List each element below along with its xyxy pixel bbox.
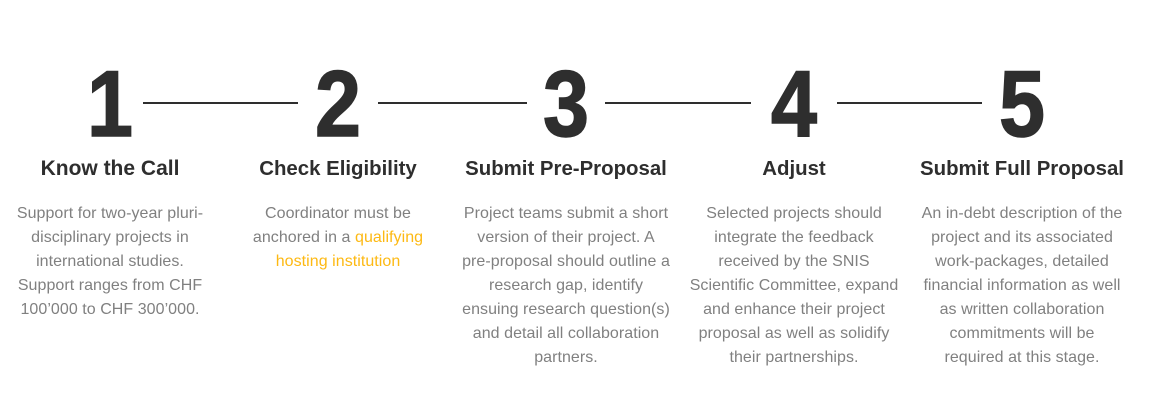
step 1: Know the Call bbox=[17, 51, 203, 318]
heading: Check Eligibility: Check Eligibility bbox=[259, 158, 417, 180]
text: step 1 description bbox=[17, 205, 203, 318]
text: step 2 description: hosting institution bbox=[276, 253, 400, 270]
text: step 3 description: pre-proposal should outline a bbox=[462, 253, 670, 270]
text: step 3 description: and detail all collaboration bbox=[473, 325, 659, 342]
text: step 4 description: Selected projects should bbox=[706, 205, 882, 222]
text: step 4 description: Scientific Committee, expand bbox=[690, 277, 898, 294]
connector line 3 to 4 bbox=[605, 102, 751, 104]
number 4: 4 bbox=[771, 51, 817, 156]
connector line 2 to 3 bbox=[378, 102, 527, 104]
step 5: Submit Full Proposal bbox=[920, 51, 1124, 366]
text: step 3 description bbox=[462, 205, 670, 366]
text: step 4 description: and enhance their project bbox=[703, 301, 885, 318]
text: step 3 description: version of their project. A bbox=[477, 229, 655, 246]
text: step 1 description: Support ranges from CHF bbox=[18, 277, 202, 294]
step 4: Adjust bbox=[690, 51, 898, 366]
heading: Submit Full Proposal: Submit Full Proposal bbox=[920, 158, 1124, 180]
text: step 5 description bbox=[922, 205, 1122, 366]
text: step 1 description: Support for two-year pluri- bbox=[17, 205, 203, 222]
text: step 5 description: commitments will be bbox=[950, 325, 1094, 342]
text: step 5 description: An in-debt description of the bbox=[922, 205, 1122, 222]
heading: Submit Pre-Proposal: Submit Pre-Proposal bbox=[465, 158, 667, 180]
text: step 2 description: anchored in a qualifying bbox=[253, 229, 423, 246]
step 3: Submit Pre-Proposal bbox=[462, 51, 670, 366]
text: step 2 description: Coordinator must be bbox=[265, 205, 411, 222]
connector line 1 to 2 bbox=[143, 102, 298, 104]
text: step 3 description: Project teams submit a short bbox=[464, 205, 668, 222]
text: step 4 description bbox=[690, 205, 898, 366]
text: step 3 description: ensuing research question(s) bbox=[462, 301, 670, 318]
text: step 5 description: as written collaboration bbox=[940, 301, 1104, 318]
text: step 4 description: their partnerships. bbox=[729, 349, 858, 366]
number 5: 5 bbox=[999, 51, 1045, 156]
text: step 2 description bbox=[253, 205, 423, 270]
text: step 5 description: work-packages, detailed bbox=[935, 253, 1109, 270]
heading: Adjust: Adjust bbox=[762, 158, 826, 180]
number 2: 2 bbox=[315, 51, 361, 156]
text: step 1 description: 100’000 to CHF 300’000. bbox=[20, 301, 200, 318]
text: step 5 description: required at this stage. bbox=[944, 349, 1100, 366]
number 1: 1 bbox=[87, 51, 133, 156]
text: step 4 description: integrate the feedback bbox=[714, 229, 874, 246]
text: step 1 description: disciplinary projects in bbox=[31, 229, 189, 246]
text: step 3 description: research gap, identify bbox=[489, 277, 643, 294]
heading: Know the Call: Know the Call bbox=[41, 157, 179, 180]
text: step 3 description: partners. bbox=[534, 349, 598, 366]
number 3: 3 bbox=[543, 51, 589, 156]
step 2: Check Eligibility bbox=[253, 51, 423, 270]
text: step 5 description: project and its associated bbox=[931, 229, 1113, 246]
text: step 5 description: financial information as well bbox=[923, 277, 1121, 294]
connector line 4 to 5 bbox=[837, 102, 982, 104]
text: step 1 description: international studies. bbox=[36, 253, 184, 270]
text: step 4 description: proposal as well as solidify bbox=[699, 325, 889, 342]
text: step 4 description: received by the SNIS bbox=[718, 253, 870, 270]
